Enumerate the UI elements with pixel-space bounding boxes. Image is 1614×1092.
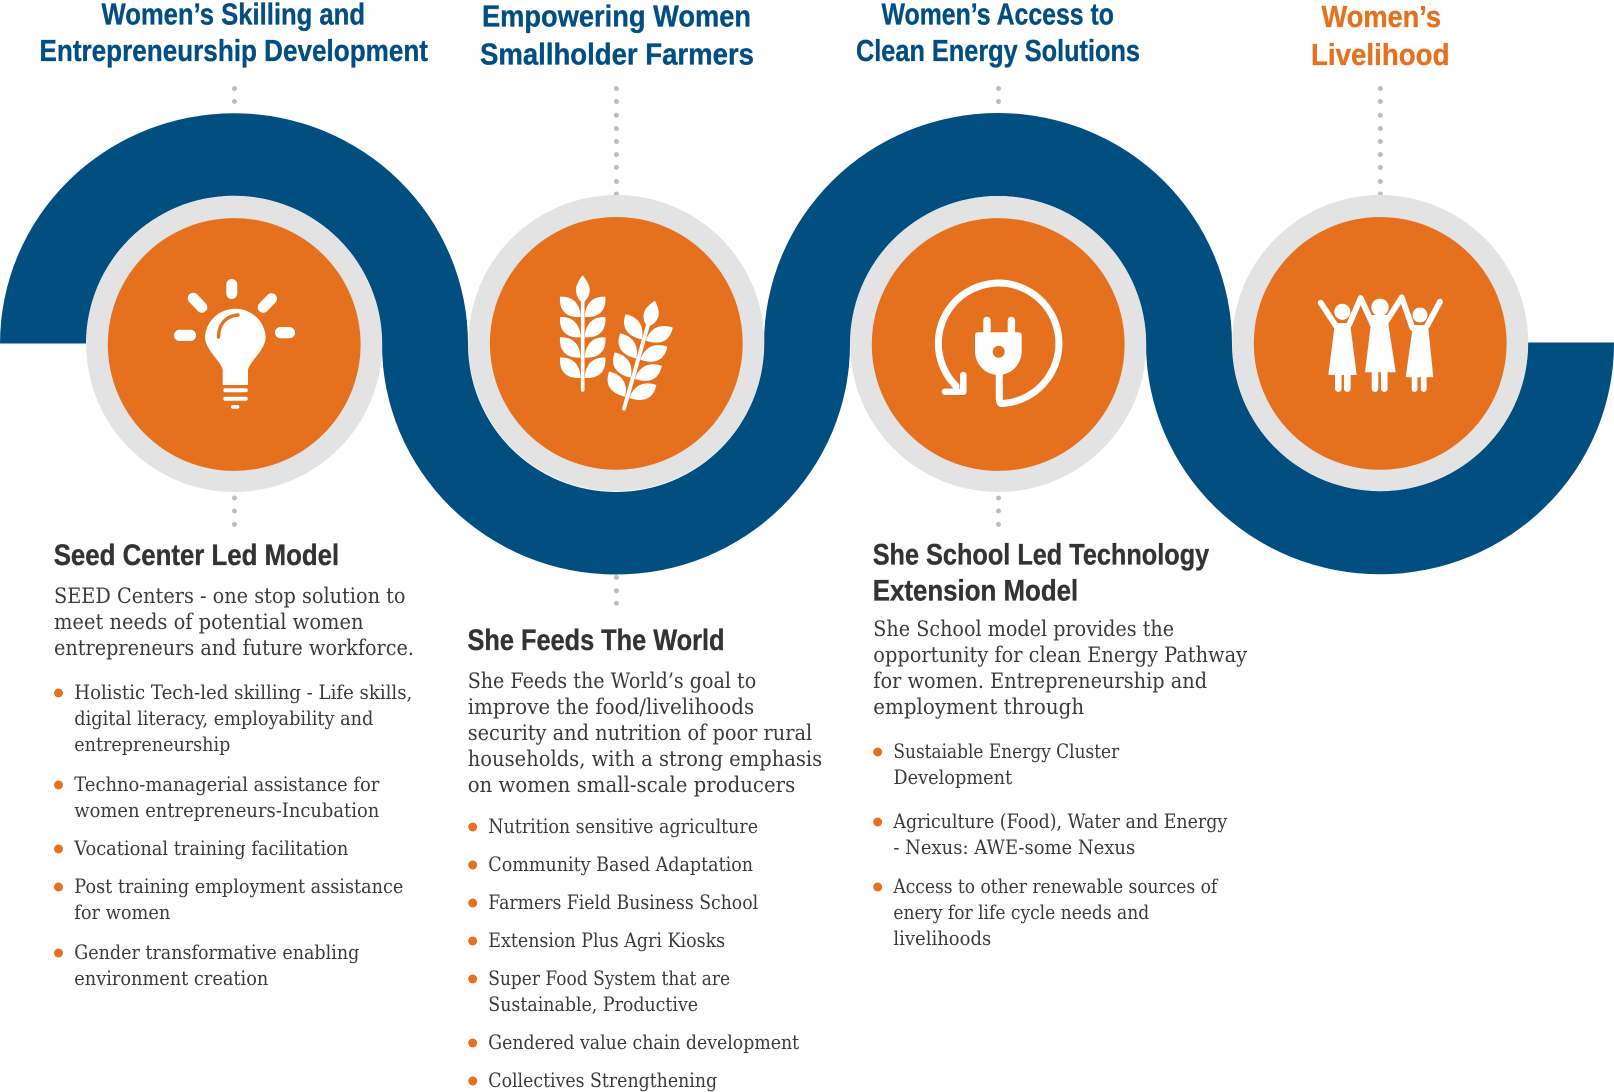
- icon: plug: [938, 283, 1059, 404]
- icon: three women: [1321, 297, 1440, 392]
- bullet list: livelihoods: [893, 927, 991, 950]
- bullet list: Sustainable, Productive: [488, 993, 698, 1016]
- panel: Seed Center Led Model: [54, 539, 414, 990]
- bullet list: enery for life cycle needs and: [893, 901, 1149, 924]
- bullet list: environment creation: [74, 967, 269, 990]
- heading: Women's Livelihood: Livelihood: [1311, 37, 1450, 72]
- heading: Clean Energy: [856, 0, 1140, 68]
- heading: Women's Livelihood: Women’s: [1322, 0, 1441, 34]
- bullet list: Extension Plus Agri Kiosks: [488, 929, 725, 952]
- dotted connectors: [232, 86, 1383, 606]
- panel heading: [873, 538, 1209, 607]
- bullet list: Community Based Adaptation: [488, 853, 753, 876]
- bullet list: Development: [893, 766, 1012, 789]
- heading: Women's Skilling: Entrepreneurship Development: [40, 33, 428, 68]
- intro text: She Feeds the World’s goal to: [468, 669, 756, 693]
- bullet list: Post training employment assistance: [74, 875, 403, 898]
- intro text: [873, 617, 1247, 719]
- heading: Women's Skilling: [40, 0, 428, 68]
- bullet list: Gender transformative enabling: [74, 941, 359, 964]
- bullet list: Sustaiable Energy Cluster: [893, 740, 1120, 763]
- intro text: [468, 669, 822, 797]
- bullet list: - Nexus: AWE-some Nexus: [893, 836, 1135, 859]
- bullet list: Gendered value chain development: [488, 1031, 799, 1054]
- bullet list: Vocational training facilitation: [73, 837, 349, 860]
- circle: livelihood: [1232, 195, 1528, 491]
- bullet list: [54, 681, 412, 990]
- bullet list: Holistic Tech-led skilling - Life skills,: [74, 681, 412, 704]
- heading: Clean Energy: Clean Energy Solutions: [856, 33, 1140, 68]
- intro text: [54, 584, 414, 660]
- intro text: employment through: [873, 695, 1084, 719]
- panel: She Feeds The World: [468, 624, 822, 1092]
- intro text: entrepreneurs and future workforce.: [54, 636, 414, 660]
- bullet list: digital literacy, employability and: [74, 707, 373, 730]
- heading: Empowering Women: [480, 0, 754, 72]
- intro text: for women. Entrepreneurship and: [873, 669, 1207, 693]
- panel heading: She School Led Technology: [873, 538, 1209, 571]
- intro text: meet needs of potential women: [54, 610, 364, 634]
- intro text: households, with a strong emphasis: [468, 747, 822, 771]
- circle: skilling: [86, 196, 382, 492]
- wave band: [0, 113, 1614, 574]
- icon: light bulb: [174, 279, 295, 409]
- heading: Empowering Women: Smallholder Farmers: [480, 36, 754, 72]
- intro text: improve the food/livelihoods: [468, 695, 754, 719]
- panel heading: Seed Center Led Model: [54, 539, 339, 572]
- bullet list: Techno-managerial assistance for: [74, 773, 380, 796]
- panel: She School Led Technology Extension Model: [873, 538, 1247, 950]
- panel heading: She Feeds The World: [468, 624, 724, 657]
- intro text: on women small-scale producers: [468, 773, 795, 797]
- intro text: SEED Centers - one stop solution to: [54, 584, 406, 608]
- bullet list: Super Food System that are: [488, 967, 730, 990]
- icon: wheat: [560, 275, 679, 416]
- bullet list: Nutrition sensitive agriculture: [488, 815, 758, 838]
- circle: energy: [850, 196, 1146, 492]
- bullet list: Agriculture (Food), Water and Energy: [893, 810, 1227, 833]
- bullet list: [873, 740, 1227, 950]
- intro text: She School model provides the: [873, 617, 1174, 641]
- bullet list: Access to other renewable sources of: [893, 875, 1219, 898]
- bullet list: Farmers Field Business School: [488, 891, 758, 914]
- intro text: opportunity for clean Energy Pathway: [873, 643, 1247, 667]
- bullet list: [468, 815, 799, 1092]
- bullet list: women entrepreneurs-Incubation: [74, 799, 380, 822]
- panel heading: Extension Model: [873, 574, 1078, 607]
- bullet list: Collectives Strengthening: [488, 1069, 717, 1092]
- intro text: security and nutrition of poor rural: [468, 721, 812, 745]
- bullet list: entrepreneurship: [74, 733, 230, 756]
- circle: farmers: [468, 195, 764, 491]
- bullet list: for women: [74, 901, 171, 924]
- heading: Women's Livelihood: [1311, 0, 1450, 72]
